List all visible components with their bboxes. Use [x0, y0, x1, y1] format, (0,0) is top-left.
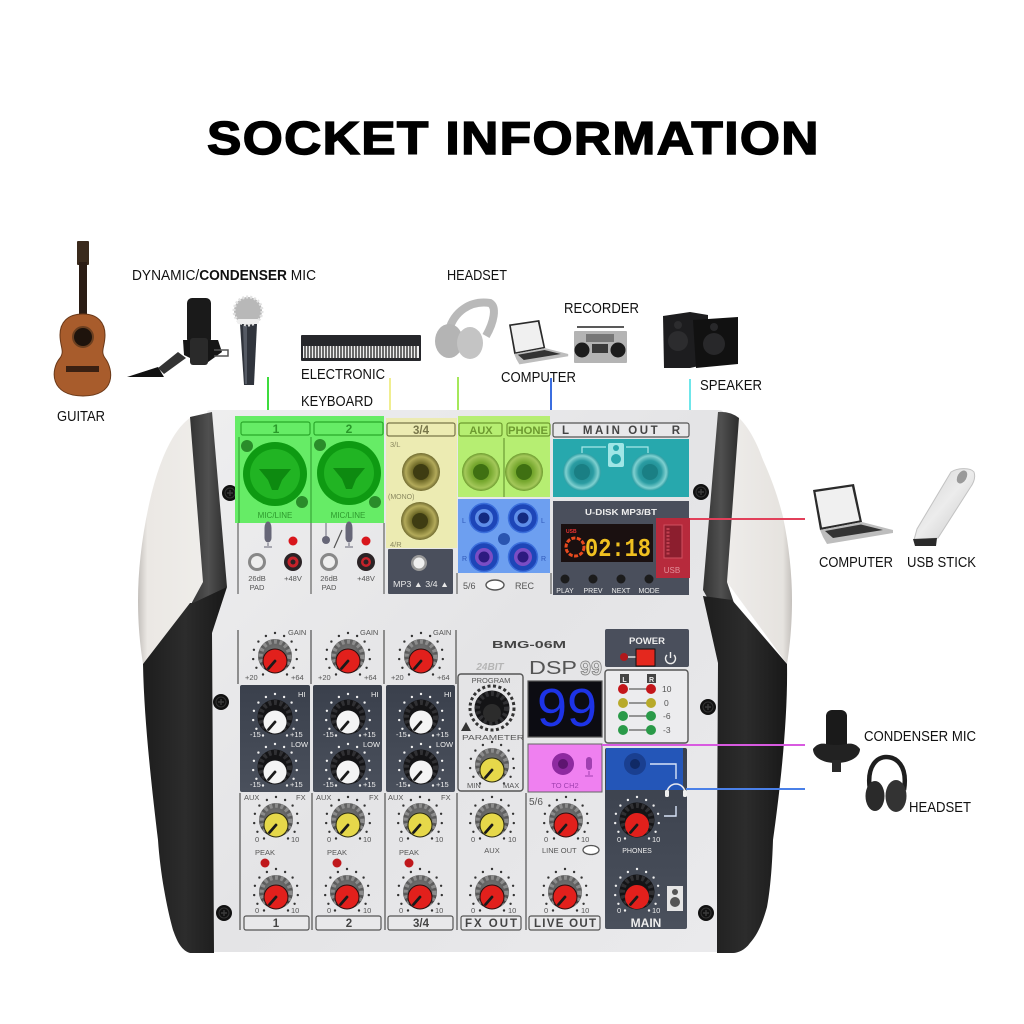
- socket zone: to CH2 mic input: TO CH2: [551, 781, 579, 790]
- EQ panels: +15: [290, 780, 303, 789]
- labels: top devices: KEYBOARD: [301, 394, 373, 410]
- channel AUX/FX and level strip: PEAK: [399, 848, 419, 857]
- channel AUX/FX and level strip: PEAK: [255, 848, 275, 857]
- icon: USB stick: [913, 469, 975, 546]
- mic channel controls: pad and phantom: PAD: [322, 583, 337, 592]
- EQ panels: LOW: [436, 740, 454, 749]
- labels: top devices: DYNAMIC/CONDENSER MIC: [132, 268, 316, 284]
- 5/6 REC label: REC: [515, 581, 535, 591]
- EQ panels: -15: [396, 780, 407, 789]
- socket zone: phones output panel: [605, 748, 687, 930]
- connector: pink to condenser mic: [602, 744, 805, 746]
- title: SOCKET INFORMATION: [207, 113, 819, 164]
- level meter: -3: [663, 725, 671, 735]
- mixer body: left wing: [138, 412, 227, 953]
- mixer front panel: [207, 410, 724, 952]
- socket zone: phones output panel: 10: [652, 906, 660, 915]
- labels: right devices: COMPUTER: [819, 555, 893, 571]
- model name and DSP logo: 24BIT: [475, 662, 505, 673]
- FX out and live out columns: FX OUT: [465, 918, 517, 930]
- level meter: [605, 670, 688, 743]
- socket zone: 3/4 stereo input: 3/4: [413, 425, 430, 437]
- U-disk MP3 BT player: PLAY: [556, 588, 574, 595]
- channel AUX/FX and level strip: 1: [273, 918, 280, 930]
- EQ panels: -15: [250, 730, 261, 739]
- power panel: [605, 629, 689, 667]
- U-disk MP3 BT player: [553, 501, 689, 595]
- channel AUX/FX and level strip: 0: [255, 906, 259, 915]
- EQ panels: HI: [298, 690, 306, 699]
- icon: condenser microphone on stand: [127, 298, 228, 377]
- socket zone: 3/4 stereo input: (MONO): [388, 494, 414, 501]
- level meter: L: [622, 677, 627, 684]
- channel gain row: +64: [291, 673, 304, 682]
- FX out and live out columns: 0: [544, 835, 548, 844]
- mic channel controls: pad and phantom: +48V: [284, 574, 302, 583]
- channel gain row: GAIN: [433, 628, 451, 637]
- channel AUX/FX and level strip: AUX: [316, 793, 331, 802]
- socket zone: phones output panel: 0: [617, 835, 621, 844]
- socket zone: blue RCA 5/6 and REC: L: [541, 518, 545, 525]
- channel AUX/FX and level strip: 10: [363, 906, 371, 915]
- mic channel controls: pad and phantom: 26dB: [248, 574, 266, 583]
- FX out and live out columns: 10: [581, 906, 589, 915]
- EQ panels: -15: [323, 780, 334, 789]
- EQ panels: LOW: [363, 740, 381, 749]
- FX out and live out columns: 10: [581, 835, 589, 844]
- socket zone: main out: L MAIN OUT R: [562, 425, 681, 437]
- icon: condenser mic right: [813, 710, 860, 772]
- mic channel controls: pad and phantom: PAD: [250, 583, 265, 592]
- MP3 selector: MP3 ▲ 3/4 ▲: [393, 580, 449, 589]
- program and parameter box: PARAMETER: [462, 733, 525, 742]
- 5/6 REC label: [463, 580, 535, 591]
- socket zone: USB port: [656, 518, 690, 578]
- socket zone: blue RCA 5/6 and REC: R: [541, 556, 546, 563]
- EQ panels: +15: [436, 780, 449, 789]
- FX out and live out columns: AUX: [484, 846, 500, 855]
- socket zone: blue RCA 5/6 and REC: R: [462, 556, 467, 563]
- mic channel controls: pad and phantom: +48V: [357, 574, 375, 583]
- icon: dynamic microphone: [234, 297, 262, 385]
- channel AUX/FX and level strip: FX: [296, 793, 306, 802]
- icon: guitar: [54, 241, 111, 396]
- socket zone: mic line inputs: 2: [346, 422, 353, 436]
- channel AUX/FX and level strip: PEAK: [327, 848, 347, 857]
- socket zone: mic line inputs: MIC/LINE: [258, 511, 292, 520]
- program and parameter box: MAX: [503, 781, 519, 790]
- U-disk MP3 BT player: MODE: [638, 588, 660, 595]
- EQ panels: [240, 685, 455, 792]
- labels: right devices: CONDENSER MIC: [864, 729, 976, 745]
- labels: top devices: ELECTRONIC: [301, 367, 385, 383]
- channel AUX/FX and level strip: 10: [363, 835, 371, 844]
- FX out and live out columns: 0: [544, 906, 548, 915]
- FX out and live out columns: LIVE OUT: [534, 918, 596, 930]
- channel AUX/FX and level strip: 0: [399, 835, 403, 844]
- level meter: 10: [662, 684, 672, 694]
- channel AUX/FX and level strip: 10: [435, 835, 443, 844]
- socket zone: phones output panel: 10: [652, 835, 660, 844]
- program and parameter box: PROGRAM: [472, 676, 510, 685]
- labels: top devices: GUITAR: [57, 409, 105, 425]
- socket zone: mic line inputs: 1: [273, 422, 280, 436]
- channel gain row: +64: [364, 673, 377, 682]
- level meter: R: [649, 677, 654, 684]
- FX out and live out columns: 0: [471, 835, 475, 844]
- U-disk MP3 BT player: NEXT: [612, 588, 631, 595]
- socket zone: phones output panel: MAIN: [631, 916, 661, 930]
- channel AUX/FX and level strip: FX: [369, 793, 379, 802]
- connector: blue to headset: [686, 788, 805, 790]
- EQ panels: +15: [363, 780, 376, 789]
- socket zone: USB port: USB: [664, 566, 680, 575]
- socket zone: AUX and PHONE: PHONE: [508, 425, 548, 437]
- 5/6 REC label: 5/6: [463, 581, 476, 591]
- model name and DSP logo: 99: [580, 658, 602, 680]
- FX out and live out columns: 10: [508, 835, 516, 844]
- channel gain row: +20: [391, 673, 404, 682]
- labels: right devices: USB STICK: [907, 555, 976, 571]
- digital display 99: 99: [537, 678, 597, 738]
- U-disk MP3 BT player: U-DISK MP3/BT: [585, 507, 658, 517]
- channel AUX/FX and level strip: 10: [435, 906, 443, 915]
- socket zone: mic line inputs: MIC/LINE: [331, 511, 365, 520]
- channel gain row: +20: [245, 673, 258, 682]
- labels: top devices: RECORDER: [564, 301, 639, 317]
- EQ panels: -15: [250, 780, 261, 789]
- EQ panels: HI: [444, 690, 452, 699]
- channel AUX/FX and level strip: 10: [291, 906, 299, 915]
- program and parameter box: MIN: [467, 781, 481, 790]
- socket zone: 3/4 stereo input: 4/R: [390, 540, 402, 549]
- channel AUX/FX and level strip: 0: [327, 835, 331, 844]
- MP3 selector: [388, 549, 453, 594]
- U-disk MP3 BT player: USB: [566, 529, 577, 535]
- level meter: 0: [664, 698, 669, 708]
- channel AUX/FX and level strip: FX: [441, 793, 451, 802]
- socket zone: 3/4 stereo input: 3/L: [390, 440, 400, 449]
- mixer body: right wing: [703, 412, 792, 953]
- channel AUX/FX and level strip: AUX: [388, 793, 403, 802]
- socket zone: phones output panel: PHONES: [622, 848, 652, 855]
- FX out and live out columns: 10: [508, 906, 516, 915]
- socket zone: main out: [553, 423, 689, 497]
- EQ panels: +15: [363, 730, 376, 739]
- U-disk MP3 BT player: 02:18: [585, 534, 651, 564]
- channel gain row: +64: [437, 673, 450, 682]
- EQ panels: +15: [290, 730, 303, 739]
- EQ panels: -15: [396, 730, 407, 739]
- channel AUX/FX and level strip: 10: [291, 835, 299, 844]
- FX out and live out columns: [461, 797, 600, 930]
- icon: grey headset: [435, 303, 494, 359]
- socket zone: AUX and PHONE: [458, 416, 550, 497]
- socket zone: blue RCA 5/6 and REC: [458, 499, 550, 573]
- program and parameter box: [458, 674, 525, 791]
- EQ panels: -15: [323, 730, 334, 739]
- EQ panels: LOW: [291, 740, 309, 749]
- labels: right devices: HEADSET: [909, 800, 971, 816]
- icon: black headset right: [866, 757, 906, 812]
- mic channel controls: pad and phantom: 26dB: [320, 574, 338, 583]
- socket zone: to CH2 mic input: [528, 744, 602, 792]
- model name and DSP logo: BMG-06M: [492, 640, 566, 651]
- connector lines: top: [268, 377, 690, 498]
- FX out and live out columns: 5/6: [529, 797, 543, 808]
- channel gain row: [238, 628, 456, 684]
- channel gain row: GAIN: [288, 628, 306, 637]
- icon: laptop right: [813, 484, 893, 544]
- mic channel controls: pad and phantom: [238, 522, 551, 594]
- level meter: -6: [663, 711, 671, 721]
- channel AUX/FX and level strip: 3/4: [413, 918, 430, 930]
- model name and DSP logo: DSP: [529, 658, 577, 678]
- channel gain row: GAIN: [360, 628, 378, 637]
- socket zone: blue RCA 5/6 and REC: L: [462, 518, 466, 525]
- icon: laptop top: [509, 320, 568, 364]
- labels: right devices: [819, 555, 976, 816]
- channel AUX/FX and level strip: AUX: [244, 793, 259, 802]
- socket zone: mic line inputs: [235, 416, 384, 523]
- socket zone: phones output panel: 0: [617, 906, 621, 915]
- icon: speakers: [663, 312, 738, 368]
- icon: electronic keyboard: [301, 335, 421, 361]
- FX out and live out columns: LINE OUT: [542, 846, 577, 855]
- icon: boombox recorder: [574, 327, 627, 363]
- labels: top devices: [57, 268, 762, 425]
- model name and DSP logo: [475, 640, 602, 680]
- channel AUX/FX and level strip: 0: [327, 906, 331, 915]
- channel AUX/FX and level strip: 0: [399, 906, 403, 915]
- labels: top devices: HEADSET: [447, 268, 507, 284]
- EQ panels: HI: [371, 690, 378, 699]
- channel AUX/FX and level strip: 2: [346, 918, 352, 930]
- labels: top devices: COMPUTER: [501, 370, 576, 386]
- U-disk MP3 BT player: PREV: [583, 588, 603, 595]
- labels: top devices: SPEAKER: [700, 378, 762, 394]
- EQ panels: +15: [436, 730, 449, 739]
- FX out and live out columns: 0: [471, 906, 475, 915]
- socket zone: AUX and PHONE: AUX: [469, 425, 493, 437]
- connector: red to USB: [690, 518, 805, 520]
- channel gain row: +20: [318, 673, 331, 682]
- channel AUX/FX and level strip: [240, 793, 526, 930]
- power panel: POWER: [629, 636, 665, 647]
- socket zone: 3/4 stereo input: [386, 418, 457, 549]
- screws: [213, 484, 716, 921]
- channel AUX/FX and level strip: 0: [255, 835, 259, 844]
